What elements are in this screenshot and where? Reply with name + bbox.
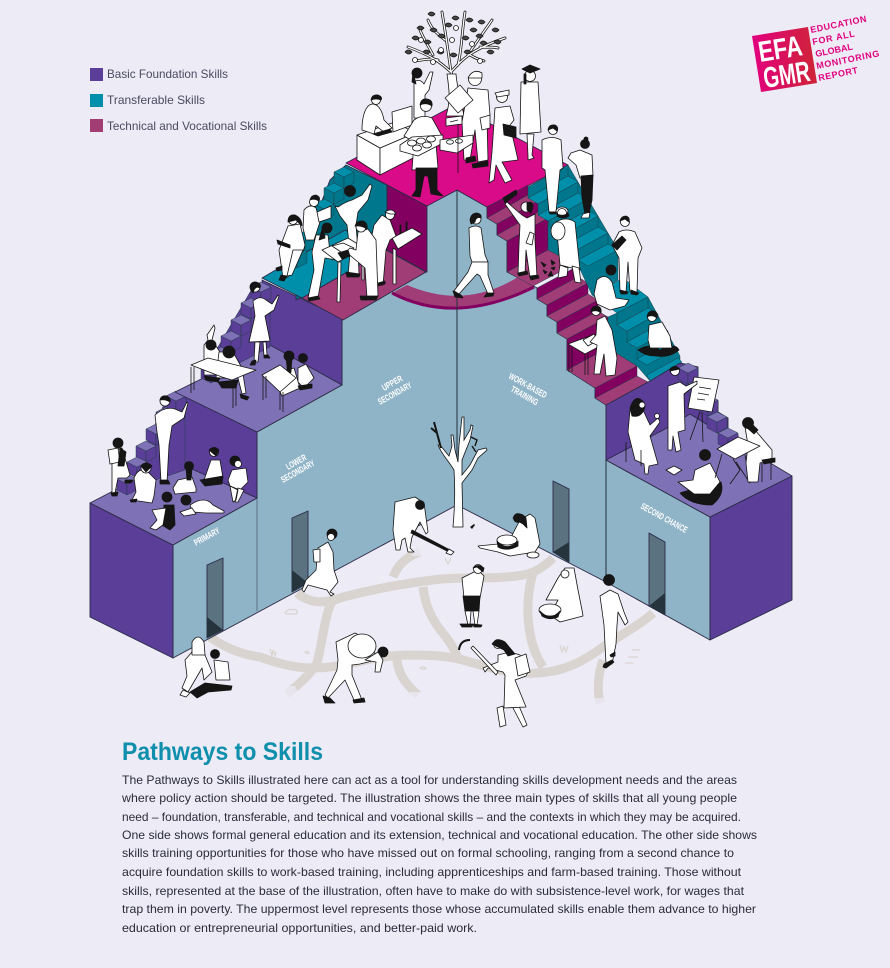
lower secondary floor xyxy=(175,345,342,432)
face: primary purple side xyxy=(90,503,173,658)
description text: skills training opportunities for those who have missed out on formal schooling, ranging from a second chance to xyxy=(122,846,734,860)
description text xyxy=(121,773,757,935)
logo: EFA GMR: EFA xyxy=(756,30,805,69)
person: man holding paper in hard hat xyxy=(445,71,490,168)
label: primary: PRIMARY xyxy=(192,525,221,548)
illustration: fruit tree xyxy=(405,12,505,116)
person: boy with backpack xyxy=(108,438,133,496)
person: seated woman in hijab xyxy=(626,398,660,474)
person: boy with bowed head xyxy=(460,564,484,627)
description text: education or entrepreneurial opportunities, and better-paid work. xyxy=(122,921,477,935)
person: baker with tray xyxy=(400,99,443,197)
legend: transferable skills: Transferable Skills xyxy=(107,93,205,107)
legend: technical and vocational skills: Technical and Vocational Skills xyxy=(107,119,267,133)
second chance back wall xyxy=(606,363,738,460)
person: man with table xyxy=(568,306,617,376)
people: two sitting youths xyxy=(180,637,232,698)
legend: basic foundation skills: Basic Foundation Skills xyxy=(107,67,228,81)
far table xyxy=(392,228,422,284)
level: top magenta platform xyxy=(346,105,568,207)
person: cross-legged on stairs xyxy=(638,311,679,356)
person: teacher xyxy=(668,366,697,452)
person: seated boy with book xyxy=(303,195,331,240)
person: woman in headscarf with basin xyxy=(539,568,583,622)
person: nurse xyxy=(489,90,518,183)
logo: EFA GMR xyxy=(752,14,880,95)
mauve floor xyxy=(302,250,426,320)
description text: skills, represented at the base of the illustration, often have to make do with subsistence-level work, for wages that xyxy=(122,884,745,898)
door: lower secondary xyxy=(292,511,308,592)
figures: upper secondary xyxy=(276,184,422,302)
person: woman with sickle and basket xyxy=(459,640,530,727)
table and woman xyxy=(715,418,775,484)
primary floor xyxy=(90,466,257,545)
door: second chance xyxy=(649,533,665,615)
label: upper secondary: SECONDARY xyxy=(376,380,413,407)
primary back wall xyxy=(177,392,257,498)
stairs: work-based training mauve xyxy=(487,185,648,405)
person: walking man xyxy=(453,213,494,298)
label: second chance: SECOND CHANCE xyxy=(639,501,689,535)
desk and computer xyxy=(357,106,415,175)
figures: ground level xyxy=(180,497,628,727)
person: hoeing xyxy=(393,497,454,555)
book xyxy=(666,466,682,475)
person: woman reading on stairs xyxy=(568,137,593,218)
level: primary xyxy=(90,391,257,545)
figures: top level xyxy=(357,65,593,218)
label: lower secondary xyxy=(279,452,316,485)
description text: The Pathways to Skills illustrated here can act as a tool for understanding skills development needs and the areas xyxy=(122,773,737,787)
person: seated long hair xyxy=(173,462,196,494)
wall: left formal education side xyxy=(173,190,457,658)
logo: EFA GMR: MONITORING xyxy=(815,48,880,71)
person: walking man with back to viewer xyxy=(600,574,628,668)
person: man at table xyxy=(338,221,378,300)
person: man on stairs xyxy=(542,125,563,214)
person: sitting girl reading xyxy=(130,463,156,503)
description text: trap them in poverty. The uppermost level represents those whose accumulated skills enable them advance to higher xyxy=(122,902,756,916)
figures: primary xyxy=(108,396,248,530)
students: right desk xyxy=(262,351,314,412)
person: man writing on wall xyxy=(335,184,372,277)
teal floor xyxy=(262,230,386,298)
logo: EFA GMR: GMR xyxy=(761,56,813,95)
person: office worker xyxy=(362,95,392,136)
level: second chance xyxy=(606,363,792,517)
description text: acquire foundation skills to work-based training, including apprenticeships and farm-based training. Those without xyxy=(122,865,742,879)
primary stairs xyxy=(117,391,186,495)
person: graduate xyxy=(520,65,541,160)
logo: EFA GMR: GLOBAL xyxy=(814,41,854,59)
table with work xyxy=(322,238,364,302)
person: man carrying load xyxy=(323,633,388,703)
logo: EFA GMR: REPORT xyxy=(817,65,859,83)
label: lower secondary: LOWER xyxy=(284,452,308,472)
illustration: bare tree xyxy=(431,417,487,529)
door: primary xyxy=(207,558,223,638)
lower secondary back wall xyxy=(262,280,342,385)
person: seated reader on landing xyxy=(594,265,629,310)
person: seated man reading xyxy=(678,450,722,505)
display box and sign xyxy=(440,116,473,173)
label: work-based training: TRAINING xyxy=(509,384,540,407)
logo: EFA GMR: FOR ALL xyxy=(811,28,856,47)
description text: where policy action should be targeted. The illustration shows the three main types of skills that all young people xyxy=(121,791,737,805)
person: man with hammer xyxy=(503,190,539,280)
person: seated girl with book xyxy=(276,215,305,281)
logo: EFA GMR: EDUCATION xyxy=(809,14,867,35)
level: lower secondary xyxy=(175,280,342,432)
ground details xyxy=(270,558,640,670)
person: female teacher xyxy=(249,282,279,365)
label: upper secondary xyxy=(376,373,413,407)
wall labels xyxy=(192,371,689,548)
legend xyxy=(90,67,267,133)
description text: One side shows formal general education and its extension, technical and vocational education. The other side shows xyxy=(122,828,757,842)
second chance stairs xyxy=(678,363,738,449)
person: man with dark object xyxy=(612,216,642,295)
face: second chance purple side xyxy=(710,476,792,640)
title: Pathways to Skills xyxy=(122,738,323,766)
person: walking woman xyxy=(302,529,338,596)
label: work-based training xyxy=(507,371,549,407)
figures: second chance xyxy=(626,366,775,505)
person: seated black trousers xyxy=(200,448,223,486)
figures: vocational stairs xyxy=(453,190,679,376)
person: crawling child xyxy=(180,495,224,516)
teal back wall xyxy=(296,165,387,300)
lower secondary stairs xyxy=(201,282,271,383)
plants xyxy=(541,260,555,276)
label: lower secondary: SECONDARY xyxy=(279,458,316,485)
label: work-based training: WORK-BASED xyxy=(507,371,549,400)
level: upper secondary xyxy=(262,165,427,320)
person: male teacher xyxy=(155,396,188,484)
person: girl on stool xyxy=(228,456,248,502)
door: work-based training xyxy=(553,481,569,562)
person: woman reaching to tree xyxy=(412,68,433,118)
person: woman at table xyxy=(308,223,338,301)
students: front left desk xyxy=(191,325,256,408)
flipchart xyxy=(688,377,719,442)
figures: lower secondary xyxy=(191,282,314,412)
ground paths xyxy=(210,546,653,712)
second chance floor xyxy=(606,414,792,517)
stairs: transferable teal right xyxy=(528,165,682,381)
doors xyxy=(207,481,665,638)
person: child in black top xyxy=(150,492,175,530)
maroon back wall xyxy=(387,185,427,272)
wall: right training side xyxy=(457,190,710,640)
description text: need – foundation, transferable, and technical and vocational skills – and the contexts in which they may be acquired. xyxy=(122,810,741,824)
arc floor between wings xyxy=(392,277,534,308)
person: woman in hat with basket xyxy=(551,207,581,283)
person: seated woman with basin xyxy=(478,514,540,558)
teal stairs xyxy=(287,167,354,268)
ground V line and walls: building base xyxy=(90,190,792,658)
label: upper secondary: UPPER xyxy=(380,373,405,393)
person: scientist at far table xyxy=(371,210,407,286)
